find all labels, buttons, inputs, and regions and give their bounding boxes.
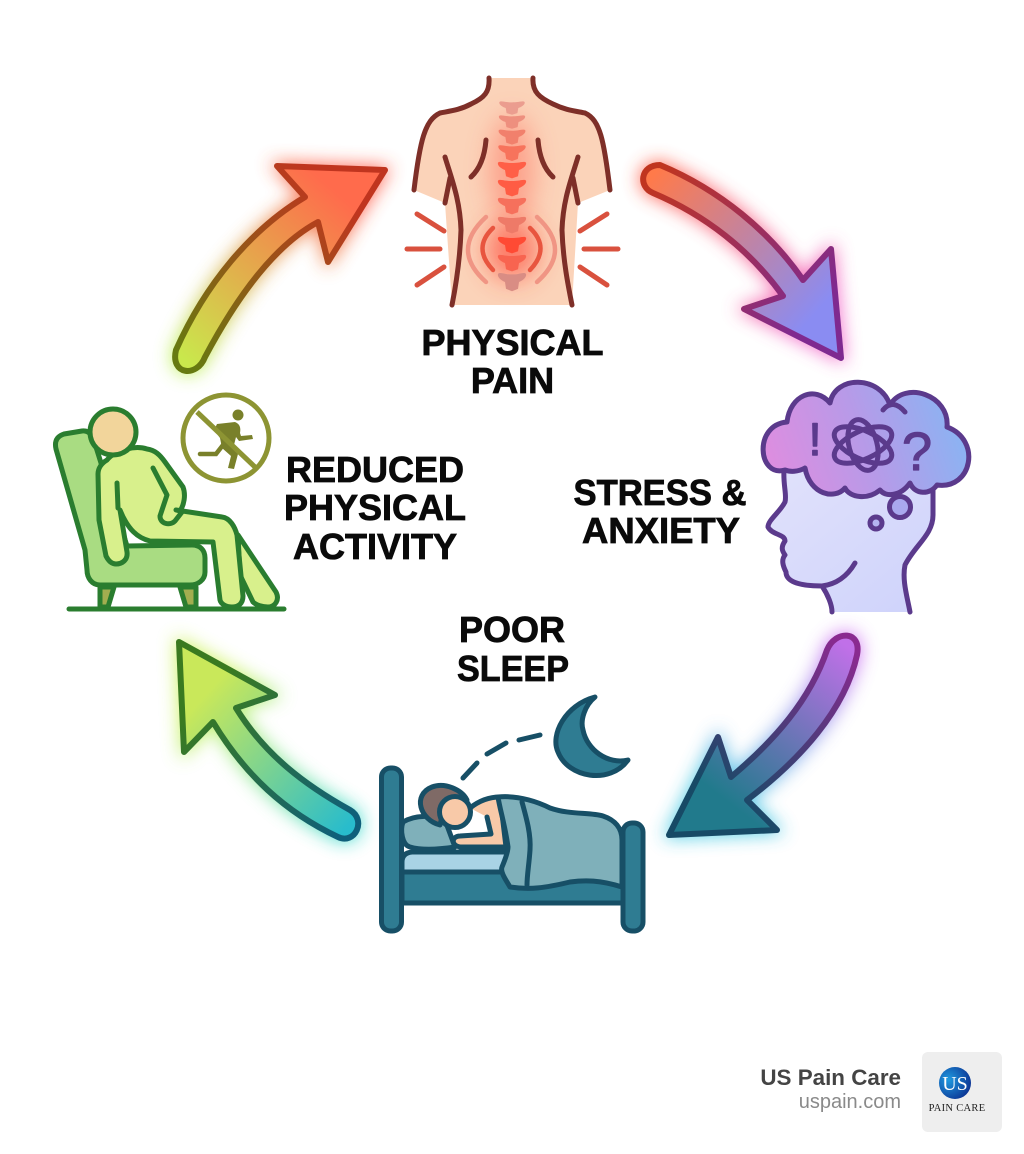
icon: moon and dashed path xyxy=(463,697,628,778)
pain radiating arcs xyxy=(468,217,555,282)
arrow: poor sleep to reduced activity xyxy=(179,642,358,839)
thought cloud xyxy=(763,382,969,497)
arrow: stress to poor sleep xyxy=(669,636,858,835)
blanket xyxy=(498,797,622,888)
icon: head with anxious thoughts xyxy=(763,382,969,612)
heading: stress and anxiety: ANXIETY xyxy=(582,510,740,551)
cloud inner fold xyxy=(883,404,905,412)
pillow xyxy=(402,816,455,849)
icon: person sleeping in bed xyxy=(382,768,643,931)
exclamation mark: ! xyxy=(809,414,821,465)
atom symbol xyxy=(829,416,897,474)
body xyxy=(98,448,243,607)
icon: no running sign xyxy=(183,395,269,481)
heading: physical pain: PAIN xyxy=(471,360,554,401)
logo: US Pain Care xyxy=(922,1052,1002,1132)
arrow: physical pain to stress xyxy=(643,165,841,358)
logo: US Pain Care: US xyxy=(942,1073,968,1095)
heading: reduced physical activity: PHYSICAL xyxy=(284,487,466,528)
heading: poor sleep: SLEEP xyxy=(457,648,569,689)
head xyxy=(440,796,470,828)
arrow: reduced activity to physical pain xyxy=(175,166,385,371)
hair xyxy=(420,785,467,825)
body outline xyxy=(414,78,610,305)
heading: reduced physical activity: REDUCED xyxy=(286,449,464,490)
icon: back with spine pain xyxy=(407,78,618,305)
far leg xyxy=(238,535,277,607)
ground line xyxy=(69,606,284,612)
spine vertebrae xyxy=(498,101,526,291)
head xyxy=(90,409,136,455)
brand name: US Pain Care xyxy=(760,1065,901,1090)
heading: stress and anxiety: STRESS & xyxy=(574,472,746,513)
sleeper torso and arm xyxy=(453,797,506,847)
question mark: ? xyxy=(902,422,932,482)
pain lines xyxy=(407,214,618,285)
thought bubbles xyxy=(870,496,910,529)
chair xyxy=(55,431,205,585)
heading: physical pain: PHYSICAL xyxy=(421,322,604,363)
logo: US Pain Care: PAIN CARE xyxy=(929,1103,985,1114)
heading: reduced physical activity: ACTIVITY xyxy=(293,526,457,567)
icon: person slouched in chair xyxy=(55,409,284,609)
heading: poor sleep: POOR xyxy=(459,609,565,650)
brand url: uspain.com xyxy=(799,1091,901,1113)
